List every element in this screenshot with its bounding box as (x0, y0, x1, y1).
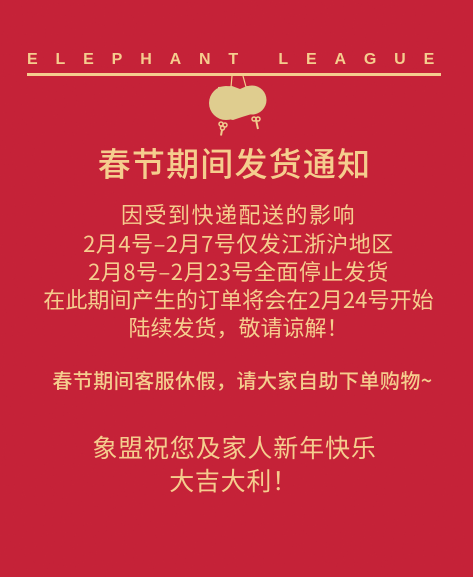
greeting (92, 429, 377, 498)
icon: twin lanterns (209, 76, 266, 136)
greeting: 大吉大利！ (169, 462, 298, 498)
notice text: 陆续发货，敬请谅解！ (128, 311, 348, 343)
greeting: 象盟祝您及家人新年快乐 (92, 429, 377, 465)
notice text (43, 198, 434, 343)
notice text: 2月8号–2月23号全面停止发货 (88, 255, 389, 287)
notice text: 因受到快递配送的影响 (121, 198, 356, 230)
customer service note: 春节期间客服休假，请大家自助下单购物~ (52, 365, 433, 394)
notice text: 2月4号–2月7号仅发江浙沪地区 (83, 227, 394, 259)
title: 春节期间发货通知 (98, 138, 371, 186)
notice text: 在此期间产生的订单将会在2月24号开始 (43, 283, 434, 315)
brand underline (27, 73, 441, 76)
brand name: ELEPHANT LEAGUE (27, 51, 452, 68)
